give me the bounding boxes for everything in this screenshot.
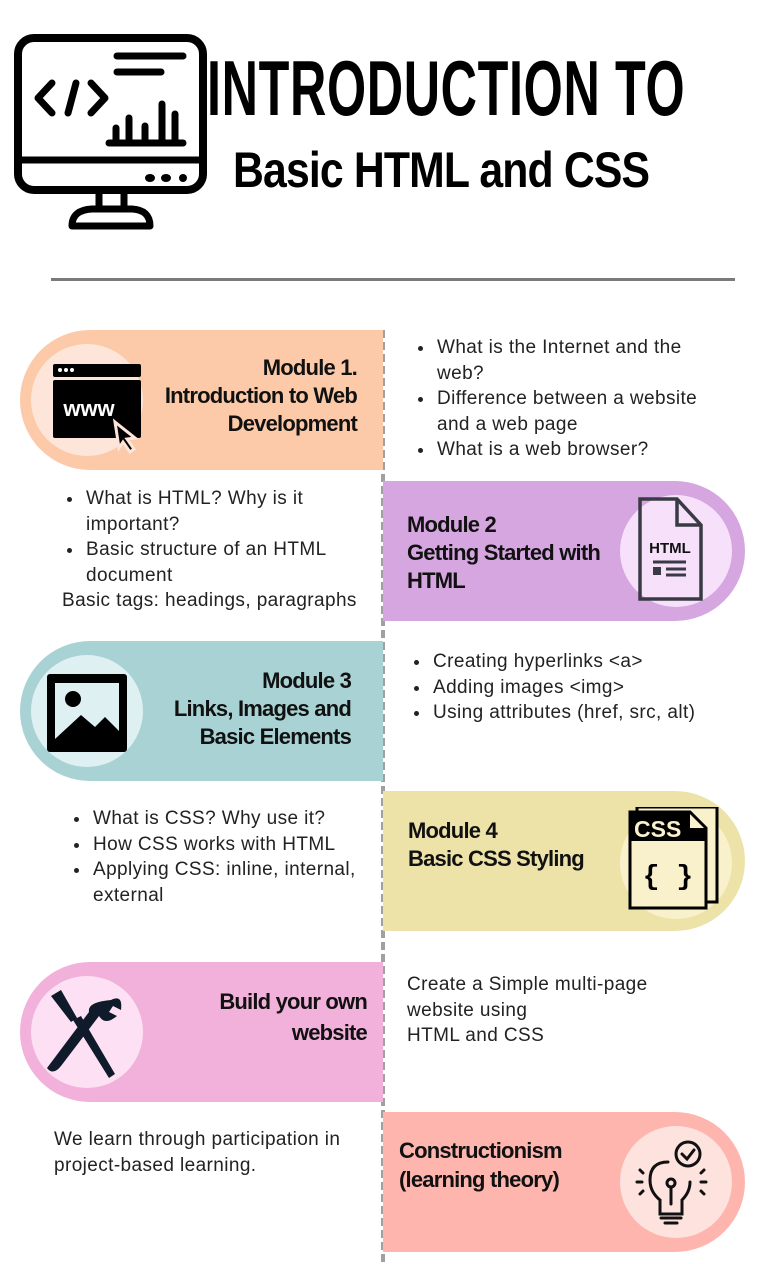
text block: module 2: Basic tags: headings, paragraphs — [62, 590, 357, 611]
text block: module 2 — [62, 488, 357, 611]
text block: module 1: Difference between a website and a web page — [437, 388, 697, 434]
heading — [165, 355, 358, 436]
text block: module 3: Using attributes (href, src, alt) — [433, 702, 695, 723]
heading: Module 2 — [407, 512, 496, 537]
heading — [407, 512, 600, 593]
text block: module 4: Applying CSS: inline, internal, external — [93, 859, 356, 906]
panel: module 2 — [383, 481, 745, 621]
heading: Getting Started with — [407, 540, 600, 565]
text block: module 1 — [418, 337, 697, 460]
text block: module 3 — [414, 651, 695, 723]
heading: Basic Elements — [200, 724, 351, 749]
title: INTRODUCTION TO — [207, 44, 685, 132]
panel: module 4 — [383, 791, 745, 931]
icon: html document: HTML — [649, 540, 691, 557]
icon: tools — [31, 976, 143, 1088]
icon: www browser — [31, 344, 143, 456]
heading — [219, 989, 367, 1045]
heading: Module 3 — [262, 668, 351, 693]
panel: constructionism — [383, 1112, 745, 1252]
text block: module 4 — [74, 808, 356, 906]
divider — [51, 278, 735, 281]
heading — [399, 1138, 562, 1192]
panel: module 1 — [20, 330, 383, 470]
text block: module 3: Adding images <img> — [433, 676, 624, 698]
text block: module 3: Creating hyperlinks <a> — [433, 651, 643, 672]
heading: Build your own — [219, 989, 367, 1014]
icon: html document — [620, 495, 732, 607]
icon: css file: CSS — [634, 816, 681, 842]
panel: module 3 — [20, 641, 383, 781]
heading: Development — [228, 411, 357, 436]
heading: Module 1. — [263, 355, 357, 380]
text block: module 2: Basic structure of an HTML document — [86, 539, 326, 586]
panel: build your own website — [20, 962, 383, 1102]
text block: constructionism: We learn through participation in project-based learning. — [54, 1129, 340, 1176]
icon: monitor with code — [14, 34, 207, 230]
heading: Module 4 — [408, 818, 497, 843]
heading — [408, 818, 584, 871]
heading — [174, 668, 352, 749]
text block: module 4: How CSS works with HTML — [93, 834, 336, 854]
timeline dashed line — [381, 330, 385, 1262]
icon: css file: { } — [643, 862, 693, 893]
text block: build: Create a Simple multi-page website using — [407, 974, 648, 1020]
text block: module 1: What is a web browser? — [437, 439, 649, 460]
heading: (learning theory) — [399, 1167, 559, 1192]
heading: Introduction to Web — [165, 383, 357, 408]
heading: Links, Images and — [174, 696, 351, 721]
icon: image — [31, 655, 143, 767]
subtitle: Basic HTML and CSS — [233, 142, 649, 198]
text block: build: HTML and CSS — [407, 1025, 544, 1046]
heading: Basic CSS Styling — [408, 846, 584, 871]
text block: module 1: What is the Internet and the web? — [437, 337, 682, 384]
heading: HTML — [407, 568, 465, 593]
text block: module 2: What is HTML? Why is it important? — [86, 488, 303, 534]
icon: lightbulb — [620, 1126, 732, 1238]
heading: website — [292, 1020, 367, 1045]
text block: build — [407, 974, 648, 1046]
icon: www browser: www — [62, 396, 116, 421]
heading: Constructionism — [399, 1138, 562, 1163]
icon: css file — [620, 807, 732, 919]
text block: module 4: What is CSS? Why use it? — [93, 808, 325, 829]
